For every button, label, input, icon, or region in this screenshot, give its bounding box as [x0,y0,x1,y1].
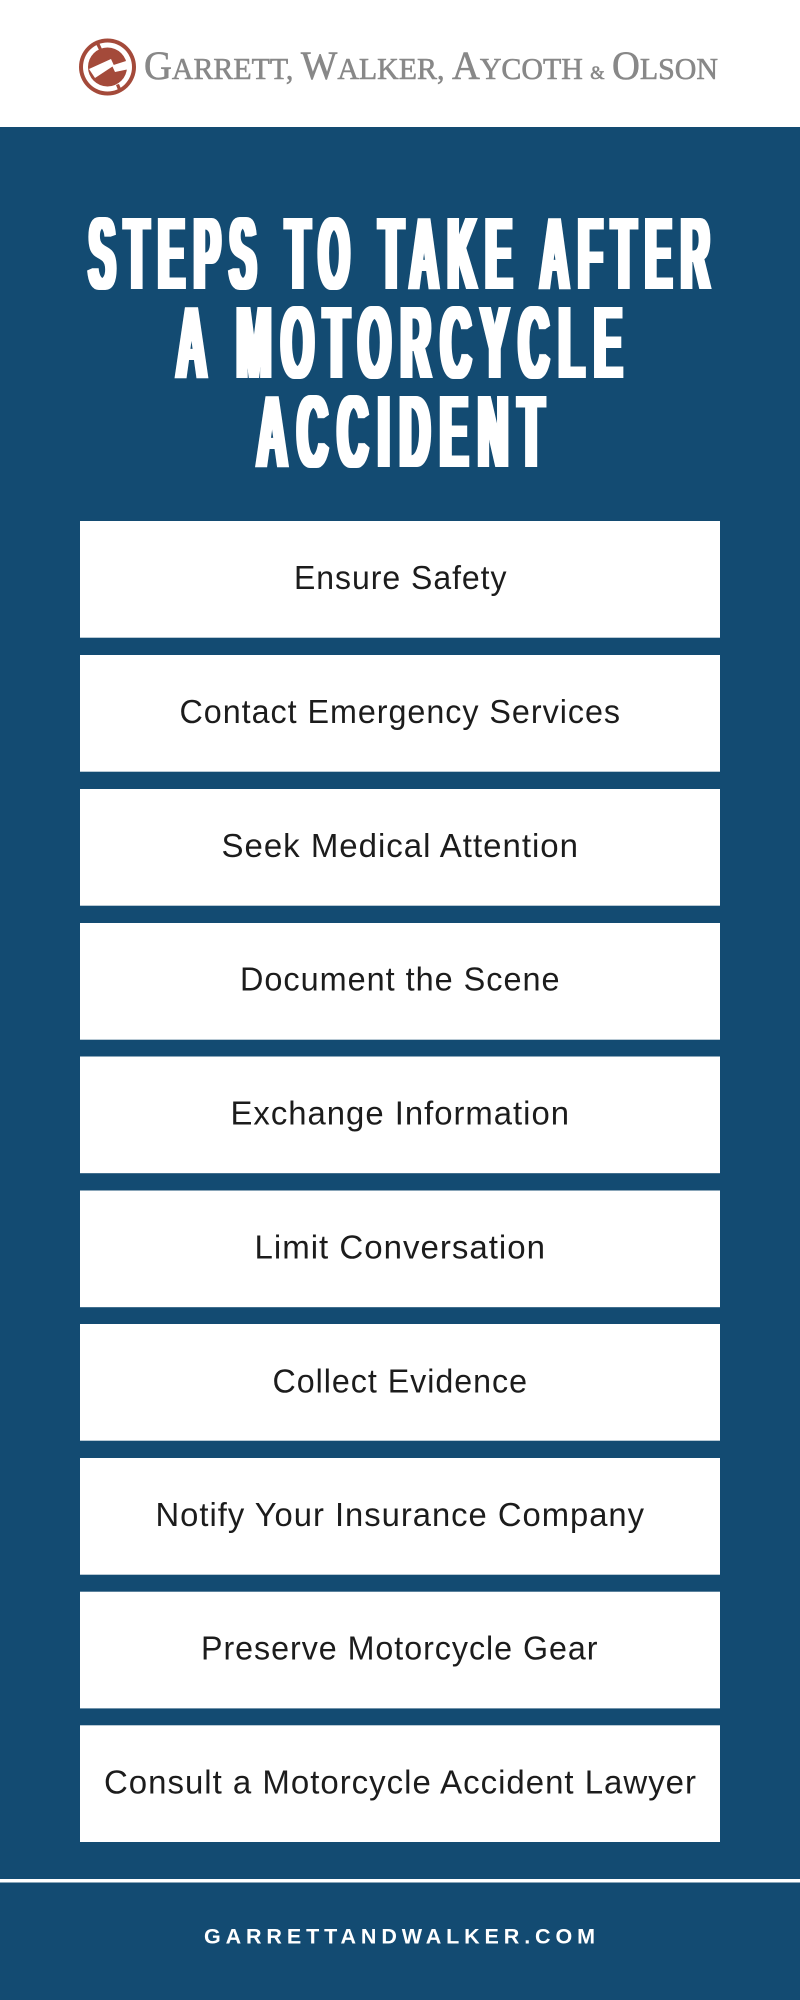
step 10 card [80,1725,720,1842]
step 8 card [80,1458,720,1575]
step 6 card [80,1190,720,1307]
step 5 card [80,1056,720,1173]
footer website url: GARRETTANDWALKER.COM [204,1924,595,1948]
step 7 card [80,1324,720,1441]
title [89,196,719,489]
step 9 card [80,1592,720,1708]
step 4 card [80,923,720,1040]
step 3 card [80,789,720,906]
step 3 card: Seek Medical Attention [222,827,579,864]
step 7 card: Collect Evidence [272,1362,528,1400]
step 4 card: Document the Scene [240,960,560,998]
logo wordmark: GARRETT, WALKER, AYCOTH & OLSON [144,43,718,88]
step 2 card: Contact Emergency Services [180,693,621,730]
step 6 card: Limit Conversation [254,1228,546,1266]
step 2 card [80,655,720,772]
step 9 card: Preserve Motorcycle Gear [201,1630,598,1667]
header band with logo [0,0,800,127]
step 1 card [80,521,720,638]
step 10 card: Consult a Motorcycle Accident Lawyer [104,1763,697,1800]
icon: firm logo [79,38,136,96]
step 5 card: Exchange Information [230,1094,570,1132]
step 1 card: Ensure Safety [294,559,508,596]
step 8 card: Notify Your Insurance Company [156,1496,645,1533]
